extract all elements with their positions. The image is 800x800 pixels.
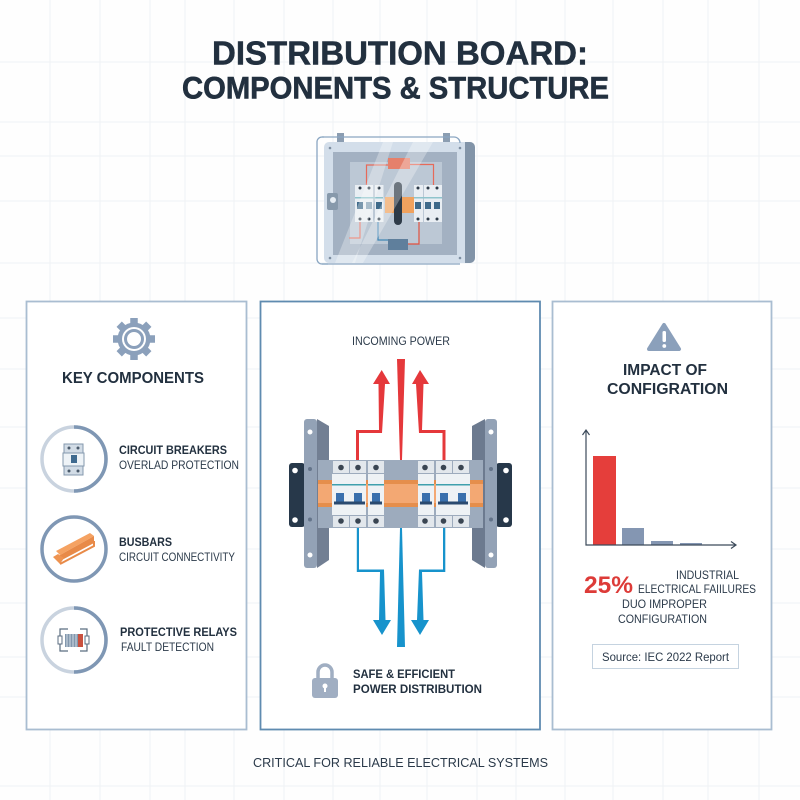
icon: gear bbox=[113, 318, 155, 360]
icon: lock bbox=[312, 665, 338, 698]
caption: safe and efficient bbox=[353, 667, 482, 696]
breakers bbox=[332, 461, 470, 527]
item: busbars: BUSBARS bbox=[119, 535, 172, 549]
heading: impact of configration: IMPACT OF bbox=[623, 362, 707, 379]
diagram: distribution board bbox=[289, 419, 512, 568]
arrows: incoming red bbox=[356, 359, 446, 460]
arrows: outgoing blue bbox=[357, 528, 445, 647]
title: DISTRIBUTION BOARD: bbox=[212, 34, 588, 71]
item: circuit breakers bbox=[42, 427, 239, 491]
item: circuit breakers: OVERLAD PROTECTION bbox=[119, 458, 239, 472]
title bbox=[182, 34, 609, 105]
stat: 25 percent: CONFIGURATION bbox=[618, 612, 707, 626]
panel: power flow bbox=[260, 302, 540, 730]
icon: warning triangle bbox=[649, 325, 679, 349]
heading: impact of configration: CONFIGRATION bbox=[607, 381, 728, 398]
stat: 25 percent: DUO IMPROPER bbox=[622, 597, 707, 611]
stat: 25 percent bbox=[584, 568, 756, 626]
item: protective relays: FAULT DETECTION bbox=[121, 640, 214, 654]
bar chart bbox=[582, 430, 736, 548]
item: protective relays: PROTECTIVE RELAYS bbox=[120, 625, 237, 639]
panel: key components bbox=[26, 302, 246, 730]
item: busbars: CIRCUIT CONNECTIVITY bbox=[119, 550, 235, 564]
caption: safe and efficient: POWER DISTRIBUTION bbox=[353, 682, 482, 696]
stat: 25 percent: 25% bbox=[584, 572, 633, 599]
source box bbox=[592, 644, 738, 668]
label: incoming power: INCOMING POWER bbox=[352, 336, 450, 348]
title: COMPONENTS & STRUCTURE bbox=[182, 69, 609, 105]
footer caption: CRITICAL FOR RELIABLE ELECTRICAL SYSTEMS bbox=[253, 755, 548, 770]
icon: distribution board enclosure bbox=[317, 133, 475, 264]
item: busbars bbox=[42, 517, 235, 581]
source box: Source: IEC 2022 Report bbox=[602, 650, 730, 664]
stat: 25 percent: ELECTRICAL FAIILURES bbox=[638, 582, 756, 596]
heading: impact of configration bbox=[607, 362, 728, 398]
stat: 25 percent: INDUSTRIAL bbox=[676, 568, 739, 582]
panel: impact of configuration bbox=[552, 302, 772, 730]
heading: key components: KEY COMPONENTS bbox=[62, 370, 204, 387]
item: circuit breakers: CIRCUIT BREAKERS bbox=[119, 443, 227, 457]
item: protective relays bbox=[42, 608, 237, 672]
caption: safe and efficient: SAFE & EFFICIENT bbox=[353, 667, 456, 681]
